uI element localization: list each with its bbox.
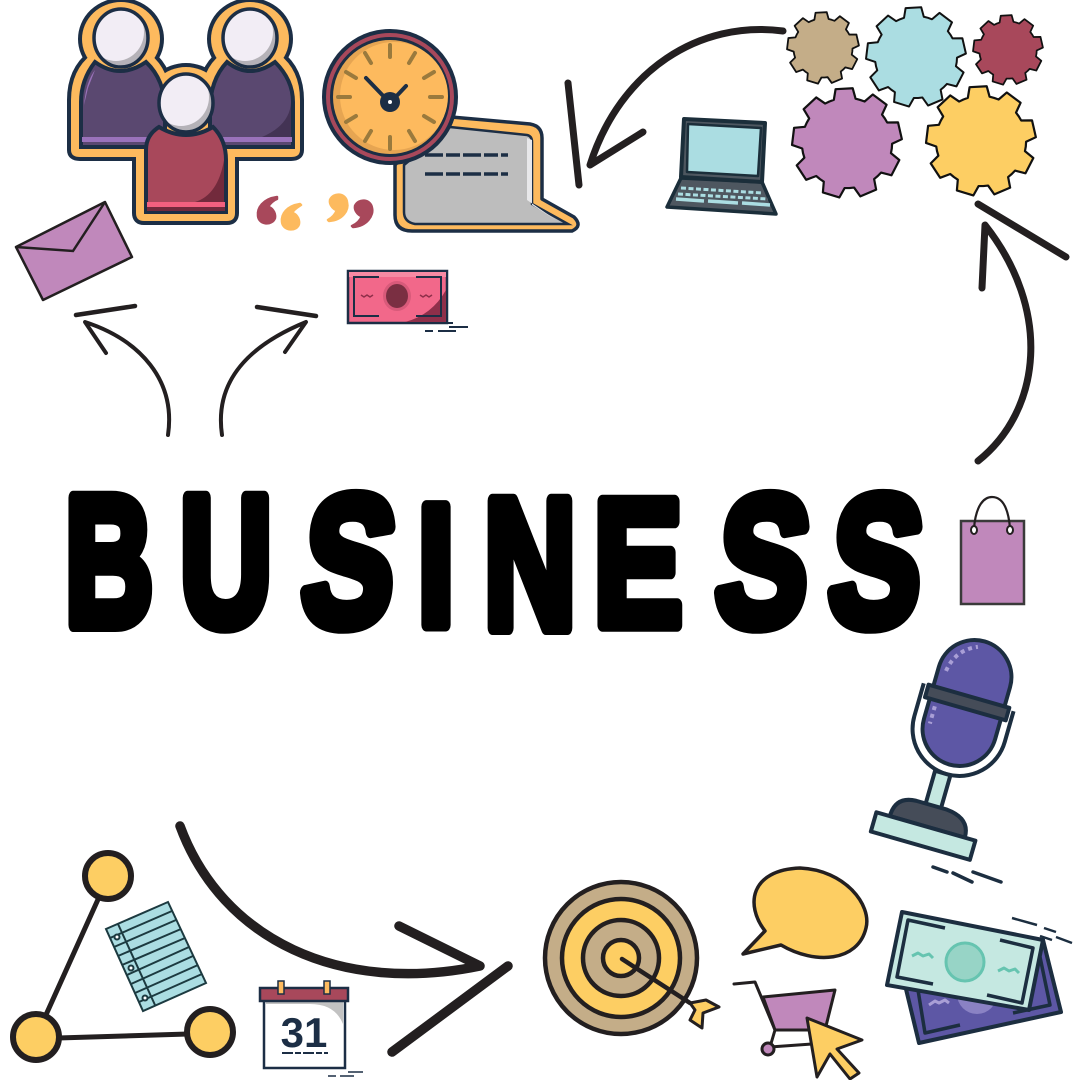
- left person body: [81, 62, 167, 147]
- icon: notepad: [106, 902, 206, 1011]
- arrow: bag to gears: [978, 204, 1066, 461]
- left person head: [88, 3, 148, 67]
- icon: pink banknote: [348, 271, 468, 331]
- title: B: [65, 459, 153, 665]
- calendar date: 31: [281, 1009, 327, 1056]
- icon: network triangle: [13, 853, 233, 1060]
- title: S: [709, 457, 818, 665]
- icon: business team: [71, 2, 300, 221]
- icon: microphone: [871, 626, 1030, 860]
- gear: blue: [863, 5, 969, 109]
- front person body: [146, 127, 226, 212]
- gear: tan: [785, 11, 861, 85]
- icon: wall clock: [322, 29, 458, 165]
- title: U: [180, 457, 272, 665]
- arrow: right up: [221, 307, 316, 435]
- right person head: [217, 3, 277, 67]
- icon: envelope: [16, 202, 132, 300]
- icon: shopping bag: [961, 497, 1024, 604]
- title: S: [822, 457, 931, 665]
- title: N: [484, 460, 576, 668]
- icon: laptop: [667, 119, 776, 214]
- arrow: gears to team: [568, 30, 783, 185]
- gear: yellow: [923, 84, 1039, 198]
- icon: banknotes: [887, 912, 1072, 1043]
- title: I: [417, 470, 455, 662]
- right person body: [210, 62, 293, 147]
- speed lines: microphone: [933, 867, 1001, 882]
- icon: speech bubble: [743, 868, 867, 957]
- arrow: network to target: [180, 826, 508, 1052]
- gear: purple: [789, 86, 905, 200]
- title: S: [295, 457, 404, 665]
- icon: shopping cart with cursor: [734, 982, 862, 1079]
- title: [65, 457, 931, 668]
- title: E: [594, 464, 682, 664]
- icon: quotation marks: [258, 195, 372, 229]
- icon: calendar: [260, 981, 363, 1076]
- arrow: left up: [76, 306, 169, 435]
- icon: speech screen: [395, 116, 578, 231]
- icon: target with arrow: [545, 882, 719, 1034]
- gear: red: [971, 14, 1045, 86]
- front person head: [153, 68, 213, 132]
